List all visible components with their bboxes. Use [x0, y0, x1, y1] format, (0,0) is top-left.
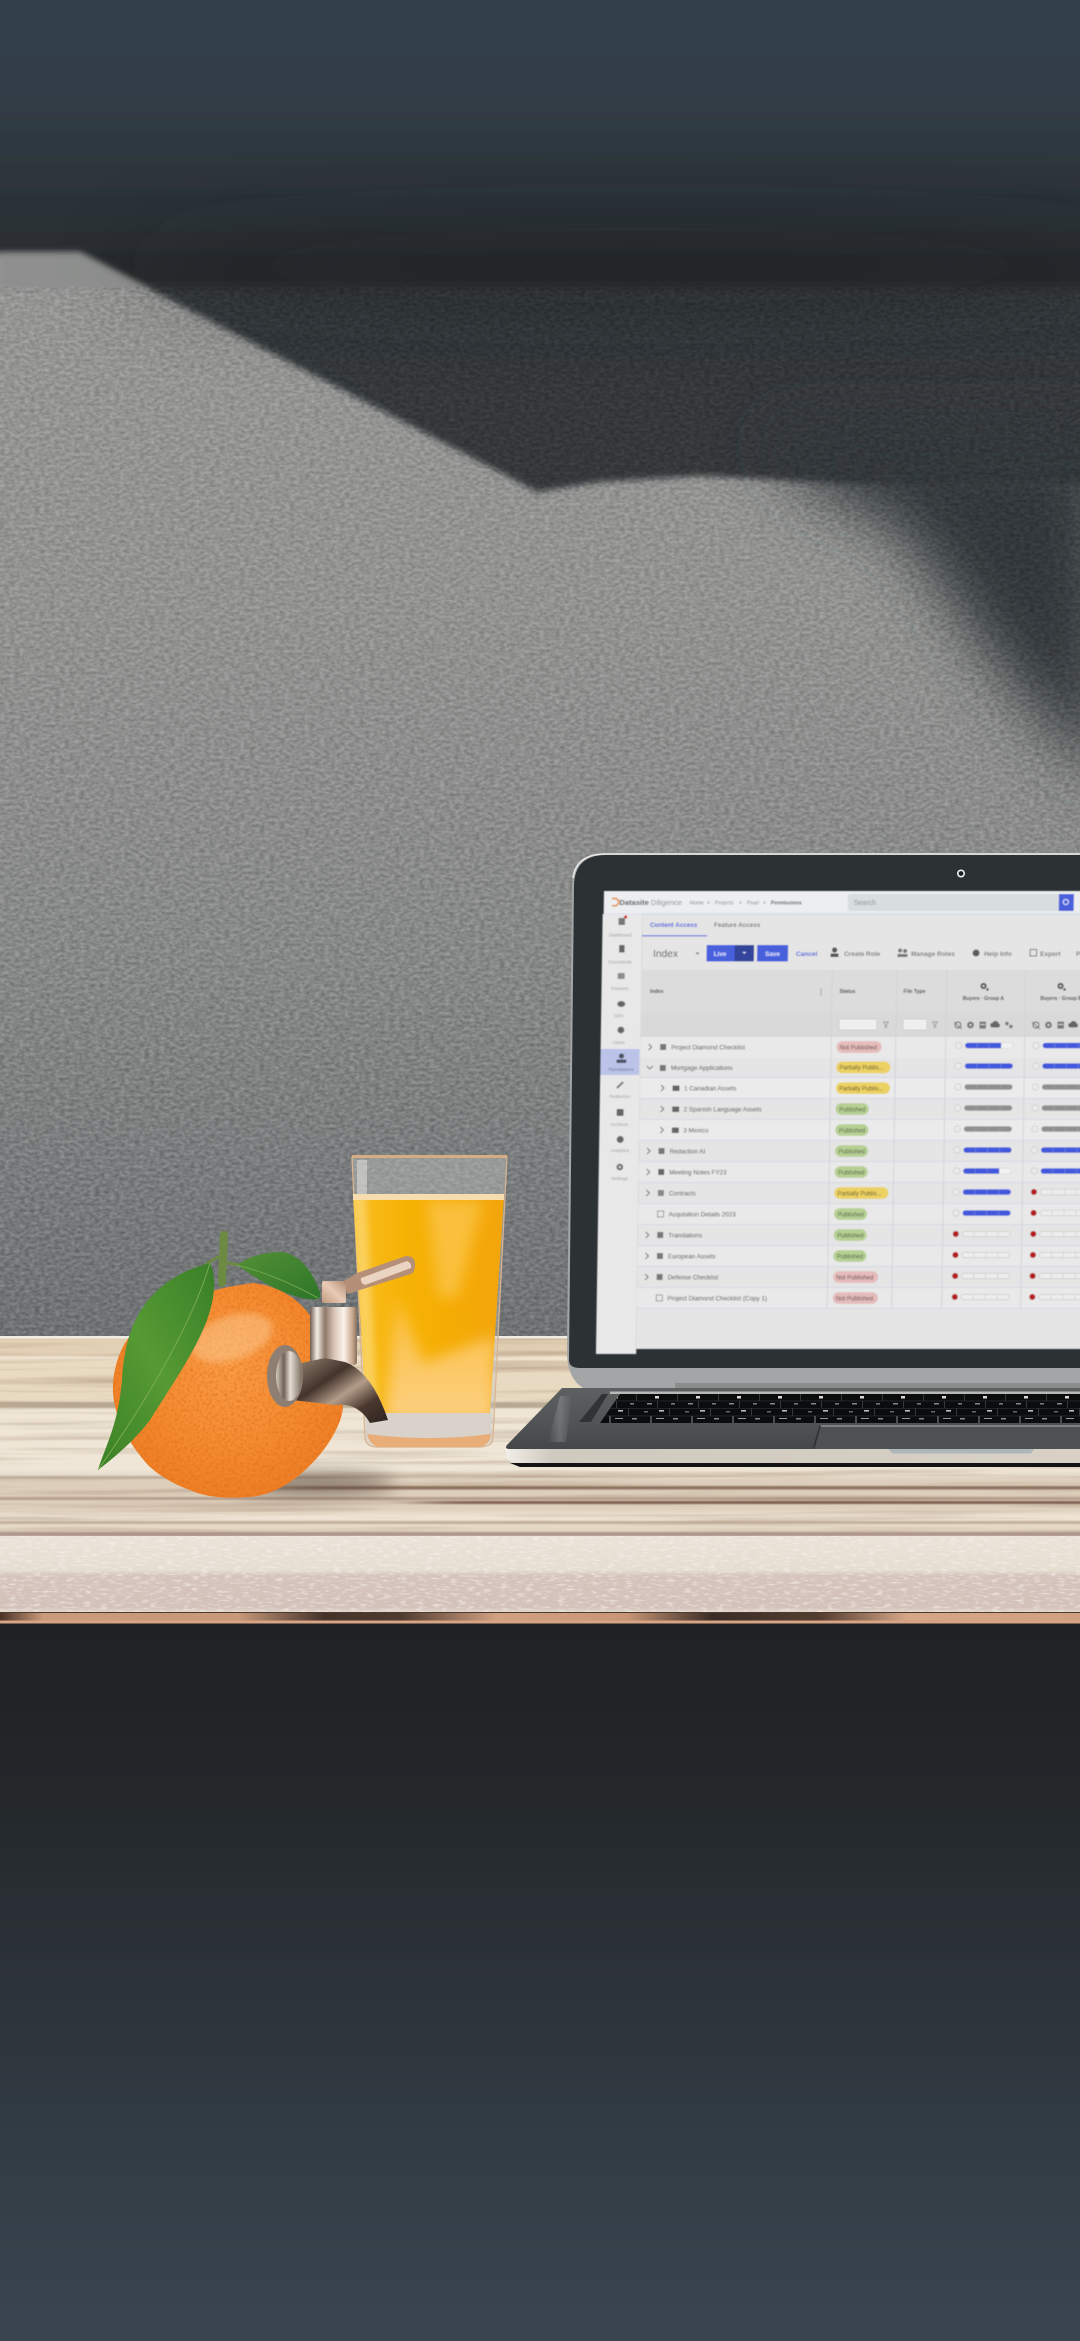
glass base	[366, 1413, 491, 1447]
app header bar	[604, 891, 1080, 914]
row: Defense Checklist: Defense Checklist	[668, 1275, 719, 1281]
row: Redaction AI: Published	[838, 1149, 865, 1155]
toolbar: Create Role	[844, 951, 881, 958]
app header bar: >	[707, 901, 710, 906]
app header bar: Datasite	[619, 898, 649, 907]
toolbar: Cancel	[796, 951, 818, 958]
app header bar: >	[763, 901, 766, 906]
spout	[292, 1358, 388, 1423]
table header: Index	[650, 989, 664, 995]
row: 2 Spanish Language Assets: Published	[839, 1107, 866, 1113]
row: Acquisition Details 2023: Published	[838, 1212, 864, 1218]
tabs	[642, 922, 761, 936]
wood grain streaks	[0, 1402, 1080, 1536]
save button: Save	[765, 951, 780, 958]
right leaf	[237, 1252, 320, 1299]
tap	[267, 1256, 415, 1423]
orange fruit	[113, 1283, 343, 1498]
dark lower panel	[0, 1624, 1080, 2341]
app header bar: >	[739, 901, 742, 906]
wooden table	[0, 1336, 1080, 1624]
app header bar: Diligence	[651, 898, 682, 907]
row: Defense Checklist: Not Published	[836, 1275, 873, 1281]
live button	[706, 945, 754, 962]
tabs: Feature Access	[714, 922, 761, 929]
row: Contracts	[646, 1187, 1080, 1199]
left leaf	[98, 1263, 214, 1470]
search box	[848, 894, 1074, 911]
table header: Status	[839, 989, 855, 995]
juice	[352, 1194, 504, 1420]
toolbar: Export	[1040, 951, 1062, 958]
shadow band across upper wall	[0, 0, 1080, 790]
wall background	[0, 0, 1080, 1340]
sidebar: Archives	[611, 1122, 629, 1127]
row: Meeting Notes FY23: Meeting Notes FY23	[669, 1170, 727, 1176]
row: 3 Mexico: 3 Mexico	[683, 1128, 709, 1134]
row: Project Diamond Checklist (Copy 1): Project Diamond Checklist (Copy 1)	[667, 1296, 767, 1302]
row: Translations: Published	[837, 1233, 864, 1239]
search box: Search	[854, 900, 876, 907]
row: Project Diamond Checklist: Not Published	[840, 1045, 877, 1051]
row: Acquisition Details 2023	[657, 1208, 1080, 1220]
tap flange	[267, 1345, 303, 1407]
table front edge	[0, 1536, 1080, 1612]
row: Translations	[646, 1229, 1080, 1241]
laptop	[506, 853, 1080, 1467]
row: 1 Canadian Assets: 1 Canadian Assets	[684, 1086, 737, 1092]
table top surface	[0, 1336, 1080, 1537]
sidebar: Analytics	[611, 1148, 630, 1153]
table rows	[637, 970, 1080, 1308]
laptop base	[506, 1388, 1080, 1467]
tabs: Content Access	[650, 922, 698, 929]
row: Acquisition Details 2023: Acquisition Details 2023	[668, 1212, 736, 1218]
row: 2 Spanish Language Assets	[661, 1103, 1080, 1115]
camera	[957, 870, 965, 878]
save button	[757, 945, 788, 962]
live button: Live	[714, 951, 727, 958]
sidebar: Trackers	[611, 986, 629, 991]
row: Contracts: Contracts	[669, 1191, 696, 1197]
cast shadow	[235, 1472, 395, 1496]
row: 3 Mexico: Published	[839, 1128, 865, 1134]
table header: Buyers · Group A	[963, 996, 1004, 1002]
row: Project Diamond Checklist (Copy 1): Not Published	[836, 1296, 873, 1302]
front edge	[506, 1449, 1080, 1467]
keyboard	[600, 1392, 1080, 1423]
row: Project Diamond Checklist (Copy 1)	[656, 1292, 1080, 1304]
sidebar: Permissions	[609, 1067, 635, 1072]
glass of orange juice	[352, 1155, 507, 1447]
sidebar: Redaction	[609, 1094, 631, 1099]
sidebar: Dashboard	[609, 933, 632, 937]
toolbar: Index	[653, 949, 678, 960]
app header bar: Home	[690, 901, 704, 906]
glass body	[352, 1157, 507, 1447]
row: Redaction AI	[647, 1145, 1080, 1157]
row: Meeting Notes FY23	[647, 1166, 1080, 1178]
row: Meeting Notes FY23: Published	[838, 1170, 865, 1176]
tap handle	[344, 1256, 415, 1294]
row: 1 Canadian Assets	[661, 1082, 1080, 1094]
toolbar: Manage Roles	[911, 951, 955, 958]
row: European Assets: Published	[837, 1254, 863, 1260]
row: Project Diamond Checklist	[649, 1041, 1080, 1053]
row: 3 Mexico	[660, 1124, 1080, 1136]
orange with tap	[98, 1235, 415, 1498]
laptop lid	[567, 853, 1080, 1388]
stem	[205, 1235, 245, 1283]
sidebar	[596, 914, 643, 1354]
row: Mortgage Applications: Mortgage Applications	[671, 1065, 733, 1072]
row: Contracts: Partially Publis...	[837, 1191, 882, 1197]
trackpad	[814, 1426, 1080, 1449]
row: Project Diamond Checklist: Project Diamond Checklist	[671, 1045, 745, 1051]
row: Defense Checklist	[645, 1271, 1080, 1283]
peel highlight	[185, 1304, 279, 1372]
row: Redaction AI: Redaction AI	[669, 1149, 706, 1155]
app header bar: Pearl	[747, 901, 759, 906]
row: 1 Canadian Assets: Partially Publis...	[839, 1087, 884, 1092]
toolbar: Help Info	[984, 951, 1012, 958]
sidebar: Settings	[611, 1176, 629, 1181]
tap body	[310, 1307, 357, 1365]
tap collar	[322, 1281, 346, 1303]
row: 2 Spanish Language Assets: 2 Spanish Language Assets	[684, 1107, 762, 1113]
row: European Assets: European Assets	[668, 1254, 716, 1260]
table header	[641, 970, 1080, 1037]
row: Mortgage Applications: Partially Publis...	[839, 1066, 884, 1072]
app header bar: Permissions	[771, 901, 802, 906]
app screen: Datasite Diligence permissions	[596, 891, 1080, 1354]
copper trim	[0, 1612, 1080, 1624]
toolbar	[653, 945, 1080, 962]
table header: File Type	[903, 989, 926, 995]
sidebar: Users	[613, 1040, 625, 1045]
row: Mortgage Applications	[647, 1062, 1080, 1073]
row: European Assets	[645, 1250, 1080, 1262]
app header bar: Projects	[715, 901, 734, 906]
sidebar: Q&A	[614, 1013, 625, 1018]
sidebar: Documents	[608, 960, 632, 964]
speaker groove	[579, 1394, 608, 1422]
row: Translations: Translations	[668, 1233, 702, 1239]
